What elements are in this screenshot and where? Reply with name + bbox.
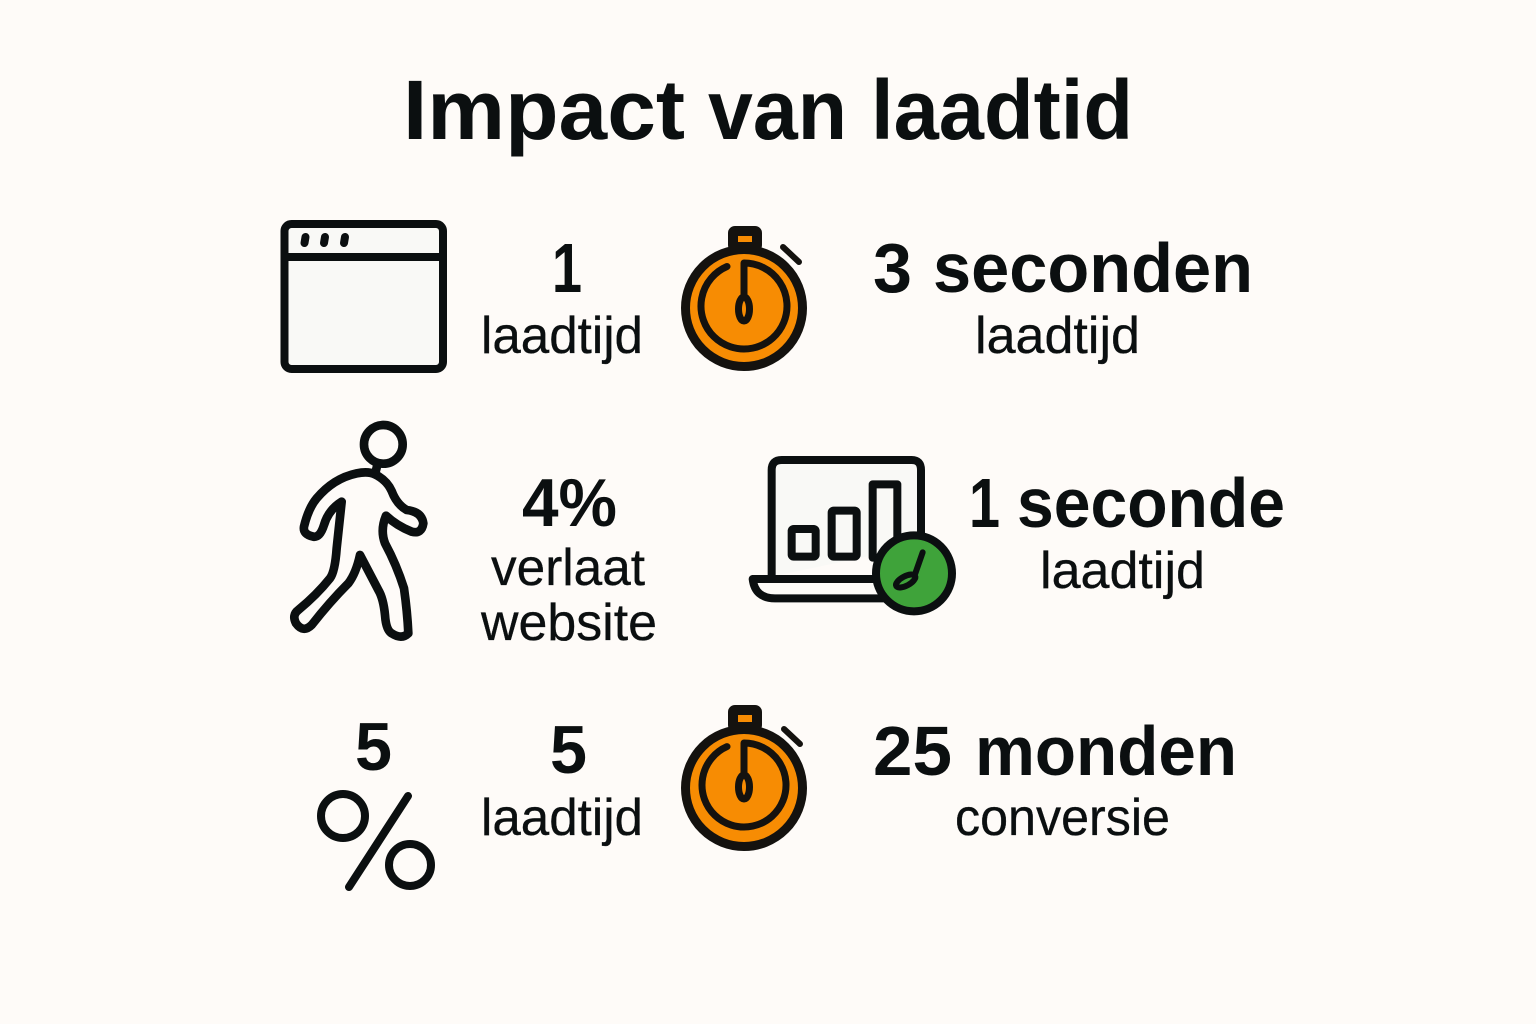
stat: 1 seconde laadtijd: 1 (969, 464, 1000, 542)
title: van (708, 63, 847, 157)
title (403, 63, 1133, 157)
icon: stopwatch bottom (686, 710, 802, 846)
stat: 5 laadtijd: laadtijd (481, 789, 643, 847)
stat: 1 seconde laadtijd (969, 464, 1285, 600)
stat: 3 seconden laadtijd: laadtijd (975, 307, 1140, 365)
stat: 1 seconde laadtijd: seconde (1017, 464, 1285, 542)
icon: walking person (294, 425, 423, 637)
stat: 1 laadtijd: 1 (552, 229, 582, 307)
icon: five percent: 5 (355, 709, 392, 785)
stat: 25 monden conversie: 25 (873, 712, 952, 790)
icon: browser window (284, 224, 443, 369)
icon: laptop with chart and green gauge (753, 460, 952, 611)
stat: 25 monden conversie (873, 712, 1237, 847)
stat: 1 laadtijd (481, 229, 643, 365)
stat: 4% verlaat website: verlaat (491, 539, 646, 597)
stat: 1 seconde laadtijd: laadtijd (1040, 542, 1205, 600)
icon: five percent (321, 709, 431, 887)
stat: 3 seconden laadtijd: 3 (873, 229, 912, 307)
stat: 5 laadtijd: 5 (550, 712, 587, 788)
stat: 3 seconden laadtijd (873, 229, 1253, 365)
stat: 5 laadtijd (481, 712, 643, 847)
stat: 25 monden conversie: monden (975, 712, 1237, 790)
stat: 4% verlaat website (480, 465, 657, 652)
stat: 3 seconden laadtijd: seconden (933, 229, 1253, 307)
stat: 25 monden conversie: conversie (955, 789, 1170, 847)
icon: stopwatch top (686, 231, 802, 366)
stat: 4% verlaat website: 4% (522, 465, 617, 541)
stat: 4% verlaat website: website (480, 594, 657, 652)
title: laadtid (871, 63, 1133, 157)
title: Impact (403, 63, 685, 157)
stat: 1 laadtijd: laadtijd (481, 307, 643, 365)
